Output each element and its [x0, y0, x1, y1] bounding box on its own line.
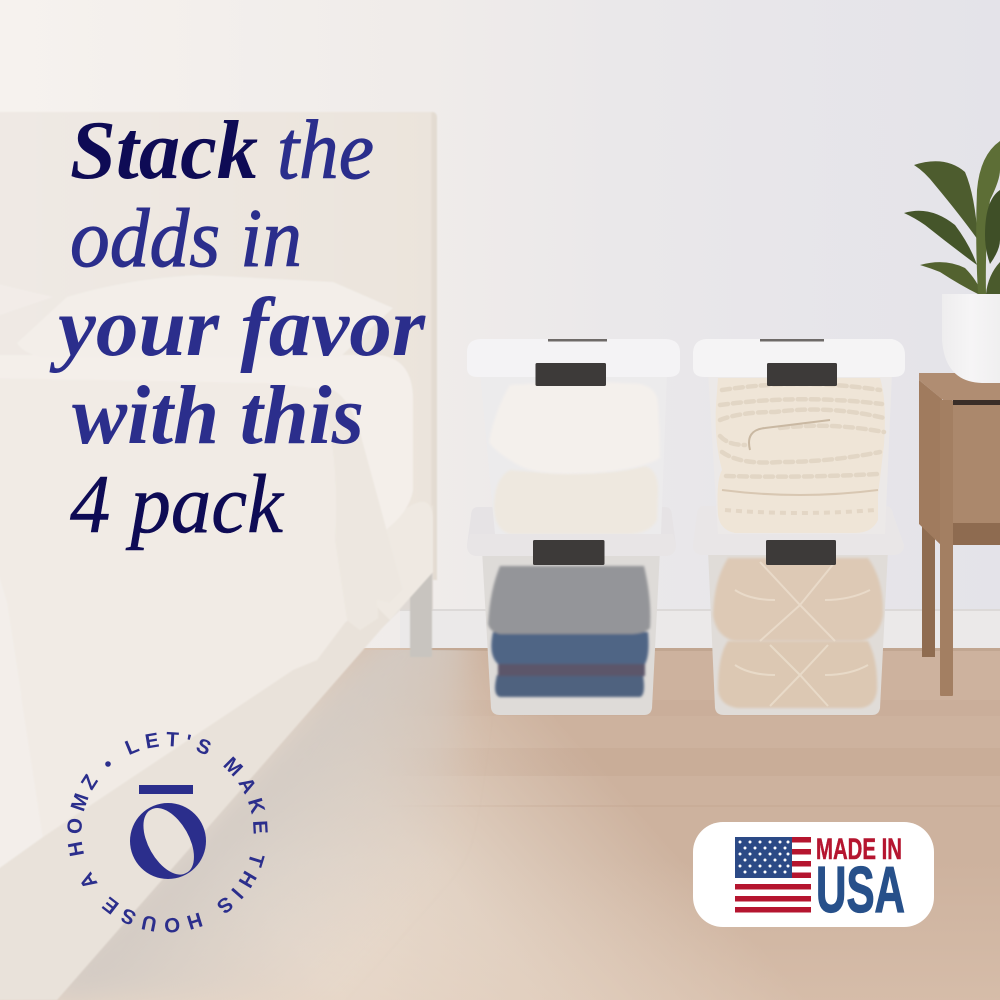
bed leg [410, 560, 432, 657]
upper pillow [489, 382, 660, 474]
potted plant [904, 141, 1000, 383]
top left bin [480, 372, 667, 534]
draped blanket [0, 378, 403, 872]
top right rear tab [760, 339, 824, 342]
bed frame rail [0, 505, 433, 1000]
top left latch [536, 363, 606, 386]
back leg [922, 520, 935, 657]
side wall beneath headboard edge [370, 560, 433, 640]
headline [49, 104, 426, 551]
drawer [953, 405, 1000, 523]
top surface [919, 373, 1000, 400]
nightstand [919, 373, 1000, 696]
pillow [17, 275, 393, 357]
bed [0, 112, 437, 1000]
drawer gap [953, 400, 1000, 405]
box stack left [467, 339, 680, 715]
side pillow [0, 283, 53, 317]
top right bin [708, 372, 892, 534]
logo mark: o with macron [130, 785, 206, 879]
top right lid [693, 339, 905, 377]
made in label: MADE IN [816, 833, 902, 866]
line 4: with this [72, 369, 364, 462]
line 5: 4 pack [70, 458, 285, 551]
us flag [735, 837, 811, 912]
rail cushion [360, 502, 433, 620]
front leg [940, 400, 953, 696]
bottom right lid back [693, 506, 904, 555]
bottom right bin [708, 550, 888, 715]
line 1: Stack [70, 104, 258, 197]
folded clothes [488, 566, 650, 697]
cable knit lower [718, 641, 877, 708]
cable knit upper [713, 558, 883, 641]
pot [942, 294, 1000, 383]
baseboard [400, 609, 1000, 648]
badge background [693, 822, 934, 927]
logo badge [67, 732, 268, 932]
box stack right [693, 339, 905, 715]
bottom left bin [482, 550, 660, 715]
side panel [919, 380, 942, 546]
bottom left lid front [467, 534, 676, 556]
line 3: your favor [49, 281, 426, 374]
line 1: the [277, 104, 374, 197]
bottom right lid front [693, 534, 904, 555]
chunky knit blanket [716, 378, 885, 533]
top left rear tab [548, 339, 607, 342]
mattress [0, 355, 413, 700]
lower rail [953, 523, 1000, 545]
leaves [904, 141, 1000, 294]
made in usa badge [693, 822, 934, 927]
separator dot [105, 761, 111, 767]
bottom left lid back [467, 507, 676, 556]
top right latch [767, 363, 837, 386]
wood floor [0, 648, 1000, 1000]
top left lid [467, 339, 680, 377]
circular tagline: LET'S MAKE THIS HOUSE A HOMZ [67, 732, 268, 932]
bottom left latch [533, 540, 604, 565]
lower pillow [494, 466, 658, 534]
headboard [0, 112, 437, 580]
shadow under bed [59, 650, 476, 1000]
bottom right latch [766, 540, 836, 565]
line 2: odds in [70, 192, 302, 285]
background wall [0, 0, 1000, 650]
usa label: USA [816, 853, 905, 926]
